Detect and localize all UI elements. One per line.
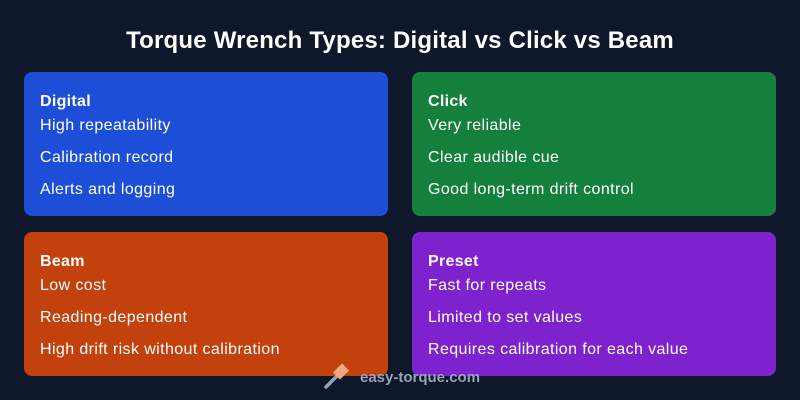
panel: digital xyxy=(24,72,388,216)
panel: click: Good long-term drift control xyxy=(428,181,634,198)
panel: digital: Calibration record xyxy=(40,149,173,166)
panel: click: Click xyxy=(428,93,468,110)
panel: beam: Beam xyxy=(40,253,85,270)
panel: beam: Reading-dependent xyxy=(40,309,187,326)
panel: beam: High drift risk without calibration xyxy=(40,341,280,358)
panel: digital: Digital xyxy=(40,93,91,110)
panel: beam: Low cost xyxy=(40,277,106,294)
title: Torque Wrench Types: Digital vs Click vs Beam xyxy=(126,27,674,54)
panel: click: Clear audible cue xyxy=(428,149,559,166)
panel: preset: Limited to set values xyxy=(428,309,582,326)
panel: digital: Alerts and logging xyxy=(40,181,175,198)
panel: preset xyxy=(412,232,776,376)
panel: beam xyxy=(24,232,388,376)
footer logo xyxy=(324,364,480,389)
panel: digital: High repeatability xyxy=(40,117,171,134)
panel: click: Very reliable xyxy=(428,117,521,134)
panel: preset: Preset xyxy=(428,253,479,270)
panel: preset: Fast for repeats xyxy=(428,277,546,294)
icon: hammer xyxy=(324,364,349,389)
footer text: easy-torque.com xyxy=(360,369,480,386)
panel: click xyxy=(412,72,776,216)
panel: preset: Requires calibration for each value xyxy=(428,341,688,358)
